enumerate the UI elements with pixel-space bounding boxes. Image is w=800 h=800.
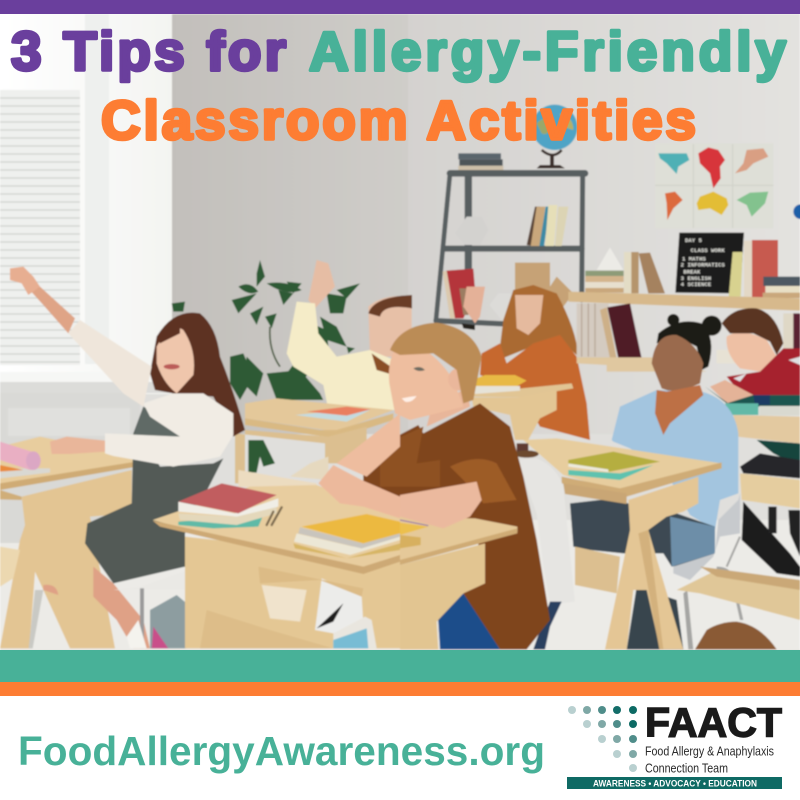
long wooden shelf with books: DAY 5 [685, 237, 703, 244]
title [11, 20, 786, 151]
long wooden shelf with books: 4 SCIENCE [681, 281, 712, 288]
title line 2: Classroom Activities: Classroom Activities [101, 89, 696, 151]
long wooden shelf with books: 3 ENGLISH [681, 275, 712, 282]
student: boy in brown shirt [363, 323, 550, 649]
logo subtitle: Food Allergy & Anaphylaxis [645, 744, 774, 758]
window with blinds [0, 14, 172, 543]
logo tagline: AWARENESS • ADVOCACY • EDUCATION [593, 778, 757, 790]
white footer [0, 696, 800, 800]
long wooden shelf with books: CLASS WORK [691, 247, 725, 254]
brown shirt boy arm [400, 482, 482, 528]
logo subtitle line 2: Connection Team [645, 760, 728, 776]
plant [172, 260, 360, 473]
red book stack [178, 483, 278, 528]
desk top [153, 485, 400, 573]
front white chair [517, 458, 575, 649]
backpack [695, 622, 777, 649]
notebook edge on front desk [400, 520, 428, 548]
orange girl desk [472, 375, 573, 440]
metal shelf unit [436, 173, 585, 324]
long wooden shelf with books: 2 INFORMATICS [681, 262, 725, 269]
grey dress [85, 407, 223, 583]
wall map [655, 143, 773, 228]
long wooden shelf with books: BREAK [683, 268, 701, 275]
back wall [0, 14, 800, 654]
student: boy with raised hand [287, 260, 412, 410]
long wooden shelf with books: 1 MATHS [682, 256, 706, 263]
front desk with books [153, 413, 400, 648]
books and objects on shelf unit [443, 205, 573, 320]
yellow notebook stack [293, 514, 400, 558]
FAACT logo [567, 700, 782, 790]
desk frame [185, 537, 400, 648]
title line 1: Allergy-Friendly: Allergy-Friendly [309, 20, 786, 82]
long wooden shelf with books [568, 204, 800, 311]
orange band [0, 682, 800, 696]
girl in blue cardigan [570, 314, 743, 649]
classroom photo [0, 14, 800, 654]
logo tagline bar [567, 777, 782, 789]
bookshelf, globe, map and board [436, 105, 800, 324]
logo wordmark: FAACT [645, 700, 782, 746]
clasped hands and arm [337, 413, 400, 477]
front desk right edge [400, 517, 517, 649]
legs and shoe [93, 567, 150, 648]
white blouse [105, 393, 233, 467]
face [157, 328, 194, 393]
blue chair [673, 493, 740, 580]
lower shelf with books [577, 303, 800, 372]
right side students and desks [363, 285, 800, 649]
student: girl raising arm [10, 267, 245, 648]
girl in orange [462, 285, 590, 440]
left desk [0, 437, 157, 648]
books on top of shelf [458, 153, 503, 170]
boy in red jacket [705, 308, 800, 577]
middle desk [515, 438, 800, 649]
title line 1: 3 Tips for: 3 Tips for [11, 20, 286, 82]
back desk [235, 398, 393, 490]
teal band [0, 650, 800, 682]
raised arm and hand [27, 287, 75, 333]
top purple bar [0, 0, 800, 14]
back row students and desks [0, 260, 412, 648]
hair [150, 313, 245, 437]
website address: FoodAllergyAwareness.org [18, 728, 545, 774]
logo dot pattern [568, 706, 637, 772]
globe [532, 105, 577, 168]
pens [267, 507, 282, 525]
